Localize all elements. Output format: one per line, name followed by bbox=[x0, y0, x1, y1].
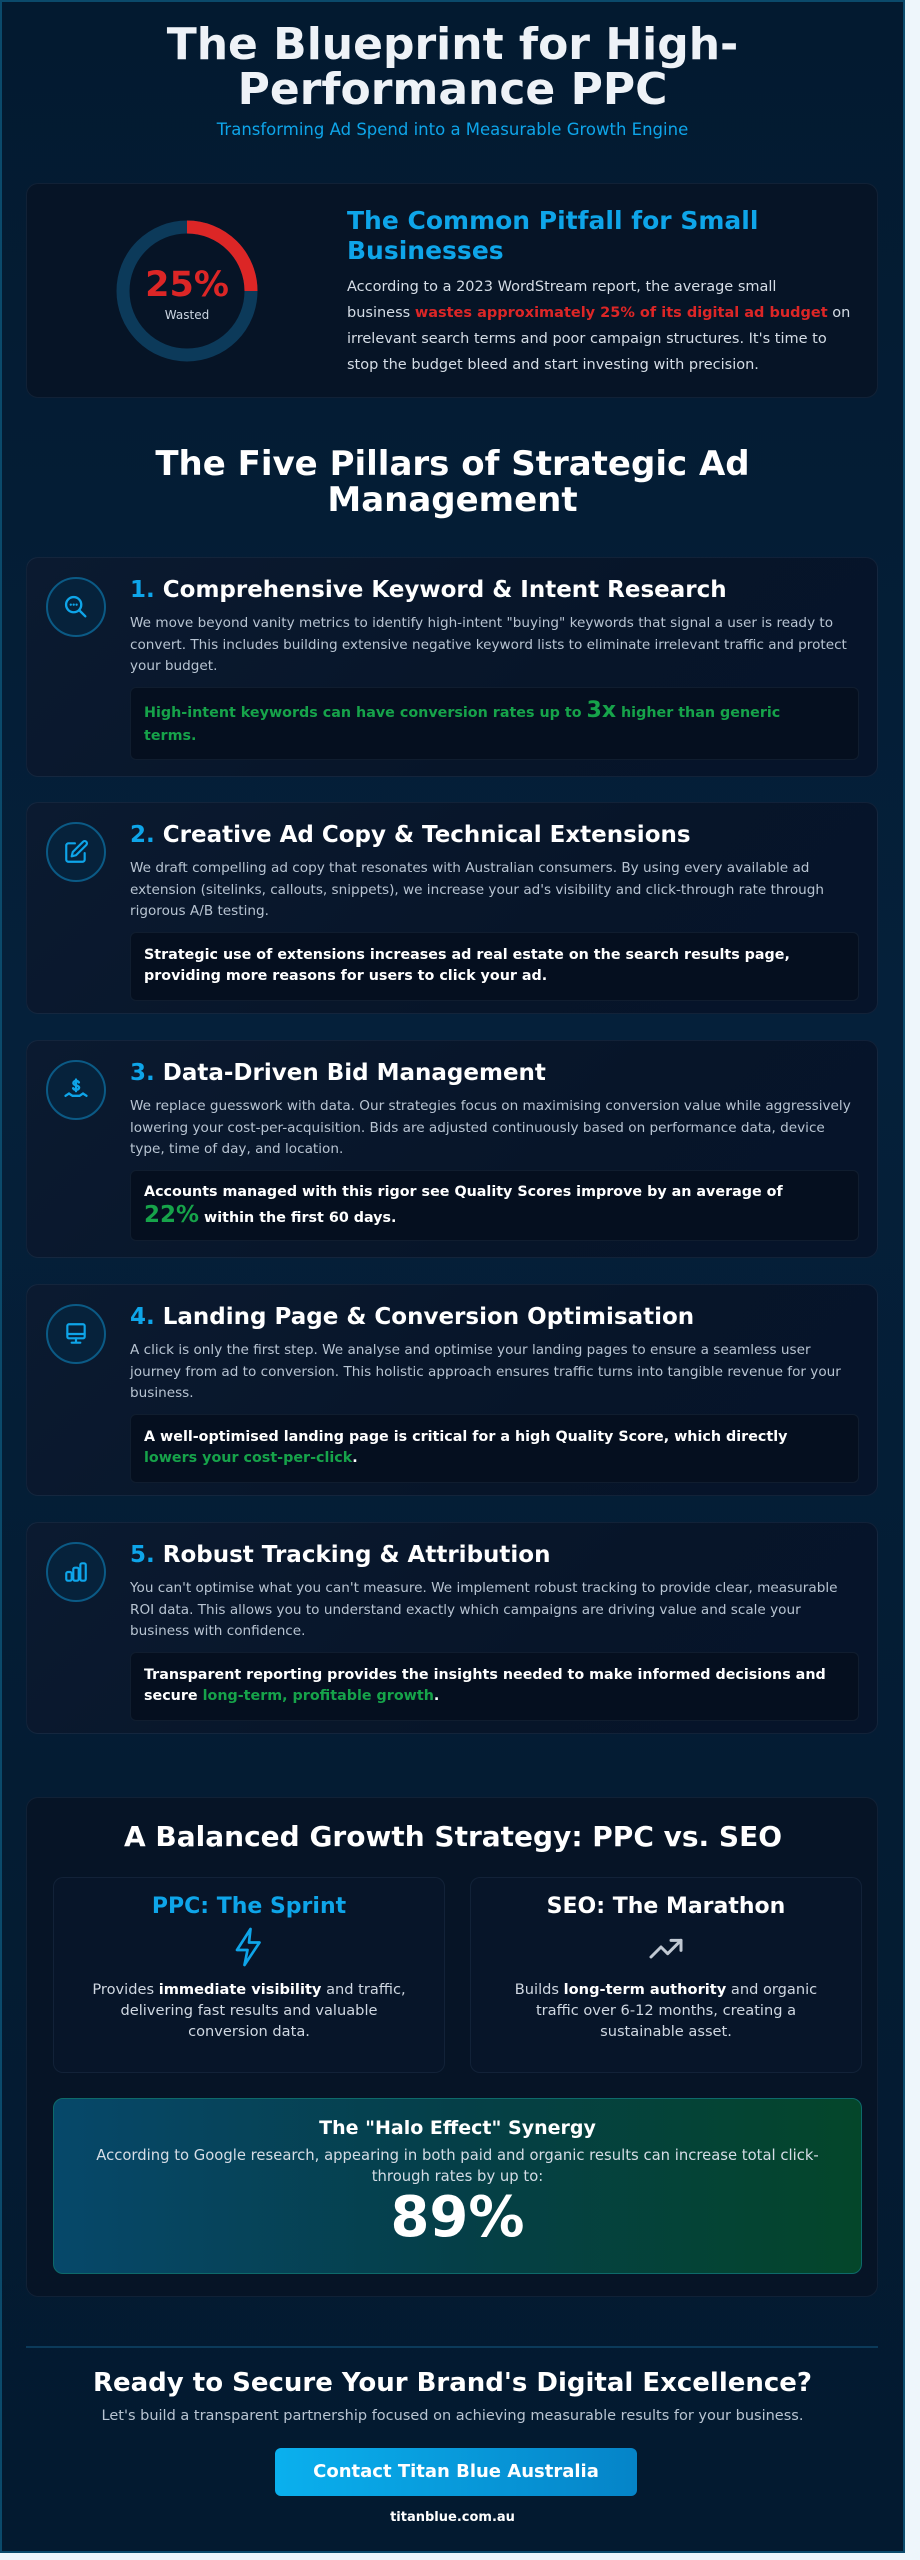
panel: pillar 3 bbox=[26, 1040, 878, 1258]
stat: 89%: 89% bbox=[390, 2185, 525, 2250]
pitfall heading: The Common Pitfall for Small Businesses bbox=[347, 206, 758, 265]
heading: five pillars: The Five Pillars of Strategic Ad bbox=[155, 444, 750, 484]
callout: Transparent reporting provides the insights needed to make informed decisions and secure long-term, profitable growth. bbox=[144, 1666, 826, 1704]
callout: Strategic use of extensions increases ad real estate on the search results page, providing more reasons for users to click your ad. bbox=[144, 946, 790, 984]
pillar 4 title: 4. Landing Page & Conversion Optimisation bbox=[130, 1304, 694, 1330]
pillar 3 text: We replace guesswork with data. Our strategies focus on maximising conversion value while aggressively lowering your cost-per-acquisition. Bids are adjusted continuously based on performance data, device type, time of day, and location. bbox=[130, 1098, 851, 1157]
pillar 5 title: 5. Robust Tracking & Attribution bbox=[130, 1542, 550, 1568]
pillar 3 title: 3. Data-Driven Bid Management bbox=[130, 1060, 546, 1086]
panel: pillar 4 bbox=[26, 1284, 878, 1496]
callout: 22%: Accounts managed with this rigor see Quality Scores improve by an average of bbox=[144, 1184, 783, 1200]
icon: bar chart bbox=[46, 1542, 106, 1602]
SEO text: Builds long-term authority and organic traffic over 6-12 months, creating a sustainable asset. bbox=[515, 1981, 817, 2040]
section heading: A Balanced Growth Strategy: PPC vs. SEO bbox=[124, 1820, 782, 1853]
SEO heading: SEO: The Marathon bbox=[547, 1894, 785, 1919]
panel: common pitfall bbox=[26, 183, 878, 398]
donut chart: 25% wasted: 25% bbox=[145, 265, 229, 305]
pillar 1 title: 1. Comprehensive Keyword & Intent Research bbox=[130, 577, 727, 603]
CTA button: Contact Titan Blue Australia bbox=[313, 2461, 599, 2482]
title: Performance PPC bbox=[238, 64, 667, 115]
footer url: titanblue.com.au bbox=[390, 2510, 515, 2525]
heading: five pillars bbox=[155, 444, 750, 520]
icon: monitor bbox=[46, 1304, 106, 1364]
heading: five pillars: Management bbox=[327, 480, 578, 520]
donut chart: 25% wasted: Wasted bbox=[165, 308, 209, 322]
pillar 4 text: A click is only the first step. We analyse and optimise your landing pages to ensure a seamless user journey from ad to conversion. This holistic approach ensures traffic turns into tangible revenue for your business. bbox=[130, 1342, 841, 1401]
icon: edit bbox=[46, 822, 106, 882]
callout: 22% bbox=[130, 1170, 859, 1240]
panel: pillar 2 bbox=[26, 802, 878, 1014]
pillar 2 text: We draft compelling ad copy that resonates with Australian consumers. By using every available ad extension (sitelinks, callouts, snippets), we increase your ad's visibility and click-through rate through rigorous A/B testing. bbox=[130, 860, 824, 919]
icon: search bbox=[46, 577, 106, 637]
CTA heading: Ready to Secure Your Brand's Digital Excellence? bbox=[93, 2368, 812, 2398]
title: The Blueprint for High- bbox=[167, 19, 738, 70]
callout: halo effect bbox=[53, 2098, 862, 2274]
callout bbox=[130, 1414, 859, 1482]
subpanel: SEO bbox=[470, 1877, 862, 2073]
panel: pillar 5 bbox=[26, 1522, 878, 1734]
icon: dollar hand bbox=[46, 1060, 106, 1120]
icon: lightning bbox=[236, 1928, 261, 1966]
callout: 3x: High-intent keywords can have conversion rates up to 3x higher than generic bbox=[144, 698, 780, 722]
CTA text: Let's build a transparent partnership focused on achieving measurable results for your business. bbox=[102, 2408, 803, 2424]
donut chart: 25% wasted bbox=[116, 220, 258, 362]
callout: 3x: terms. bbox=[144, 728, 196, 744]
callout: 3x bbox=[130, 686, 859, 760]
subtitle: Transforming Ad Spend into a Measurable Growth Engine bbox=[217, 120, 688, 139]
halo heading: The "Halo Effect" Synergy bbox=[319, 2117, 596, 2139]
callout bbox=[130, 932, 859, 1000]
title bbox=[166, 19, 738, 115]
pitfall text: business wastes approximately 25% of its digital ad budget on irrelevant search terms and poor campaign structures. It's time to stop the budget bleed and start investing with precision. bbox=[347, 305, 850, 373]
pillar 2 title: 2. Creative Ad Copy & Technical Extensions bbox=[130, 822, 691, 848]
PPC text: Provides immediate visibility and traffic, delivering fast results and valuable conversion data. bbox=[92, 1981, 406, 2040]
subpanel: PPC bbox=[53, 1877, 445, 2073]
pillar 5 text: You can't optimise what you can't measure. We implement robust tracking to provide clear, measurable ROI data. This allows you to understand exactly which campaigns are driving value and scale your business with confidence. bbox=[130, 1580, 838, 1639]
callout bbox=[130, 1652, 859, 1720]
PPC heading: PPC: The Sprint bbox=[152, 1894, 346, 1919]
halo text: According to Google research, appearing in both paid and organic results can increase total click-through rates by up to: bbox=[96, 2147, 819, 2185]
panel: PPC vs SEO bbox=[26, 1797, 878, 2297]
callout: 22%: 22% within the first 60 days. bbox=[144, 1202, 396, 1228]
callout: A well-optimised landing page is critical for a high Quality Score, which directly lowers your cost-per-click. bbox=[144, 1428, 787, 1466]
pitfall text: According to a 2023 WordStream report, the average small bbox=[347, 279, 776, 295]
panel: pillar 1 bbox=[26, 557, 878, 777]
pillar 1 text: We move beyond vanity metrics to identify high-intent "buying" keywords that signal a user is ready to convert. This includes building extensive negative keyword lists to eliminate irrelevant traffic and protect your budget. bbox=[130, 615, 847, 674]
CTA button bbox=[275, 2448, 637, 2496]
icon: trend up bbox=[649, 1938, 683, 1959]
